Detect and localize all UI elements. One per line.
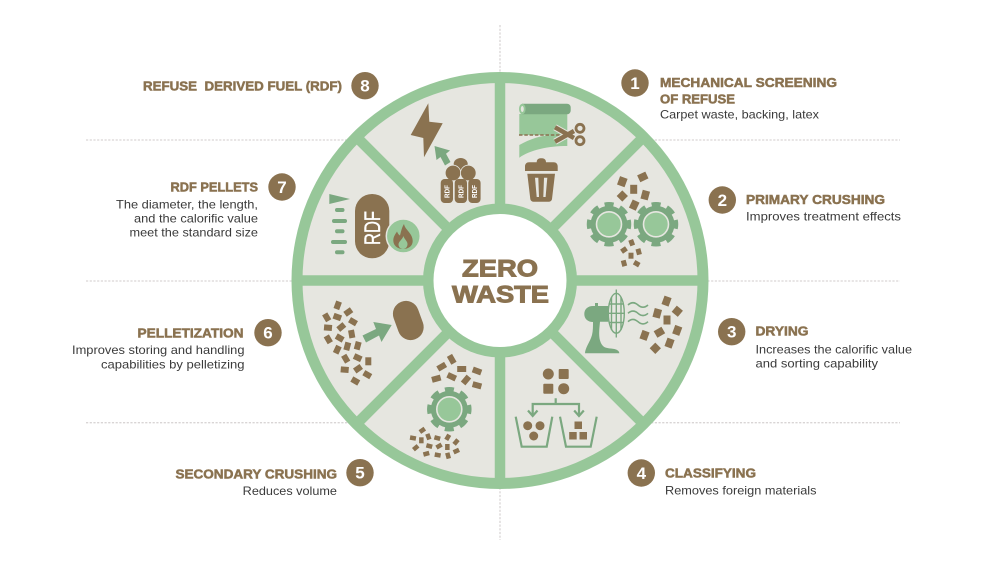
step 3 label: Increases the calorific value: [756, 342, 912, 356]
icon: lightning bolt, arrow and RDF pellet pile: [411, 103, 481, 203]
step 7 label: meet the standard size: [130, 226, 258, 240]
icon: two gears crushing pieces: [589, 172, 676, 267]
title: zero waste: [452, 256, 549, 309]
icon: dryer and wet pieces: [584, 290, 683, 354]
step 4 label: 4: [637, 464, 647, 483]
step 8 label: REFUSE DERIVED FUEL (RDF): [143, 80, 342, 94]
step 6 label: capabilities by pelletizing: [101, 357, 244, 371]
step 6 label: PELLETIZATION: [138, 326, 244, 340]
step 6 label: Improves storing and handling: [72, 343, 244, 357]
title: zero waste: ZERO: [462, 256, 538, 283]
icon: classifying into two bins: [516, 368, 597, 447]
step 1 label: Carpet waste, backing, latex: [660, 108, 819, 122]
step 4 label: Removes foreign materials: [665, 483, 816, 497]
icon: single gear secondary crushing: [410, 354, 482, 459]
icon: RDF pellet with flame: RDF: [360, 211, 385, 245]
step 7 label: 7: [277, 178, 287, 197]
step 6 label: 6: [263, 324, 273, 343]
step 7 label: RDF PELLETS: [170, 181, 258, 195]
step 8 label: [143, 72, 379, 99]
icon: RDF pellet with flame: [329, 194, 420, 258]
step 2 label: PRIMARY CRUSHING: [746, 193, 885, 207]
icon: lightning bolt, arrow and RDF pellet pile: RDF: [472, 184, 479, 198]
process wheel: [292, 72, 708, 489]
step 5 label: [176, 459, 374, 498]
step 3 label: and sorting capability: [756, 356, 878, 370]
step 8 label: 8: [360, 77, 370, 96]
icon: lightning bolt, arrow and RDF pellet pile: RDF: [444, 184, 452, 198]
icon: pelletization pieces, arrow and pellet: [322, 297, 427, 386]
step 6 label: [72, 319, 282, 371]
step 5 label: Reduces volume: [243, 484, 337, 498]
step 7 label: [116, 173, 296, 240]
step 3 label: 3: [727, 323, 736, 342]
icon: carpet roll, scissors and trash can: [519, 104, 584, 202]
step 4 label: [628, 459, 816, 497]
step 5 label: 5: [355, 464, 365, 483]
step 2 label: Improves treatment effects: [746, 210, 901, 224]
step 7 label: and the calorific value: [134, 212, 258, 226]
step 1 label: 1: [630, 74, 640, 93]
step 4 label: CLASSIFYING: [665, 466, 756, 480]
step 3 label: DRYING: [756, 325, 808, 339]
step 5 label: SECONDARY CRUSHING: [176, 467, 337, 481]
step 7 label: The diameter, the length,: [116, 197, 258, 211]
step 2 label: 2: [718, 191, 727, 210]
step 1 label: [621, 69, 837, 122]
title: zero waste: WASTE: [452, 282, 549, 309]
step 1 label: MECHANICAL SCREENING: [660, 76, 837, 90]
step 2 label: [709, 186, 901, 224]
icon: lightning bolt, arrow and RDF pellet pile: RDF: [458, 184, 466, 198]
step 3 label: [718, 318, 912, 370]
step 1 label: OF REFUSE: [660, 92, 735, 106]
